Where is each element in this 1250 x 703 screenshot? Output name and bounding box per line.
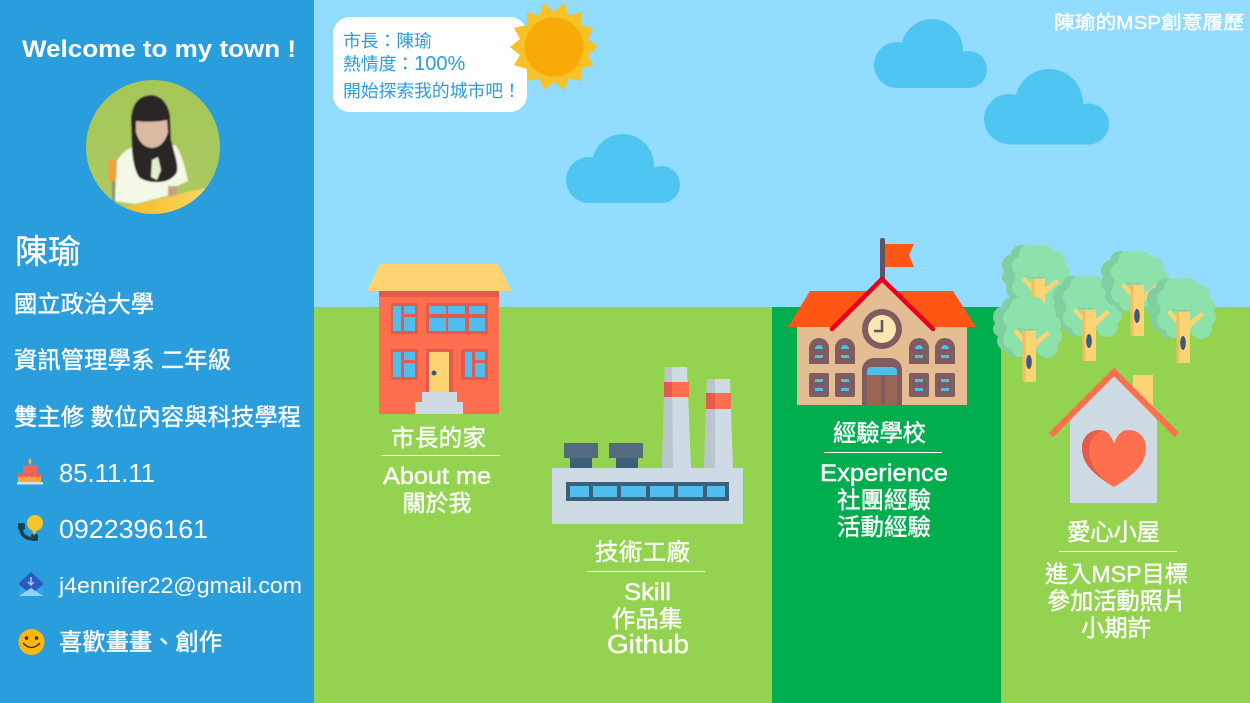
- name: 陳瑜: [15, 233, 81, 270]
- birthday: 85.11.11: [59, 458, 155, 488]
- title: top right: 陳瑜的MSP創意履歷: [1054, 12, 1244, 33]
- bubble line 3: 開始探索我的城市吧！: [343, 81, 521, 101]
- grass ground: [314, 307, 1250, 703]
- building: factory: [552, 367, 743, 524]
- label: factory: Skill: [624, 579, 671, 606]
- bubble line 1: 市長：陳瑜: [343, 31, 432, 51]
- label: school: Experience: [820, 460, 948, 487]
- label: school: 經驗學校: [833, 420, 926, 446]
- phone number: 0922396161: [59, 514, 208, 544]
- label: love house: 參加活動照片: [1047, 588, 1186, 614]
- label: factory: [587, 539, 705, 659]
- building: love house: [1051, 372, 1177, 503]
- profile photo: [86, 80, 220, 214]
- icon: mail: [19, 572, 43, 596]
- building: mayor's house: [367, 264, 512, 414]
- cloud 2: [984, 69, 1109, 144]
- label: love house: 愛心小屋: [1067, 519, 1160, 545]
- icon: phone: [18, 515, 43, 541]
- heading: welcome: Welcome to my town !: [22, 36, 296, 63]
- trees: [993, 245, 1216, 382]
- label: factory: 作品集: [612, 606, 682, 632]
- dark green school plot: [772, 307, 1001, 703]
- label: mayor's house: About me: [383, 463, 491, 490]
- label: mayor's house: [382, 425, 500, 516]
- label: mayor's house: 關於我: [402, 490, 472, 516]
- department: 資訊管理學系 二年級: [14, 347, 231, 373]
- label: mayor's house: 市長的家: [391, 425, 486, 451]
- label: school: 活動經驗: [837, 514, 931, 540]
- label: factory: Github: [607, 629, 689, 659]
- building: school: [788, 238, 976, 405]
- icon: smiley: [18, 629, 44, 655]
- icon: birthday cake: [17, 458, 43, 484]
- label: school: 社團經驗: [837, 487, 931, 513]
- cloud 3: [566, 134, 680, 203]
- label: love house: 小期許: [1081, 615, 1151, 641]
- university: 國立政治大學: [14, 291, 154, 317]
- hobby: 喜歡畫畫、創作: [59, 629, 222, 655]
- label: school: [820, 420, 948, 540]
- panel: profile sidebar: [0, 0, 314, 703]
- speech bubble: mayor: [333, 17, 527, 112]
- icon: sun: [510, 3, 598, 90]
- cloud 1: [874, 19, 987, 88]
- bubble line 2: 熱情度：100%: [343, 53, 466, 75]
- sky background: [314, 0, 1250, 307]
- double major: 雙主修 數位內容與科技學程: [14, 404, 301, 430]
- label: love house: [1045, 519, 1188, 641]
- label: love house: 進入MSP目標: [1045, 561, 1188, 587]
- label: factory: 技術工廠: [595, 539, 690, 565]
- email: j4ennifer22@gmail.com: [58, 573, 302, 598]
